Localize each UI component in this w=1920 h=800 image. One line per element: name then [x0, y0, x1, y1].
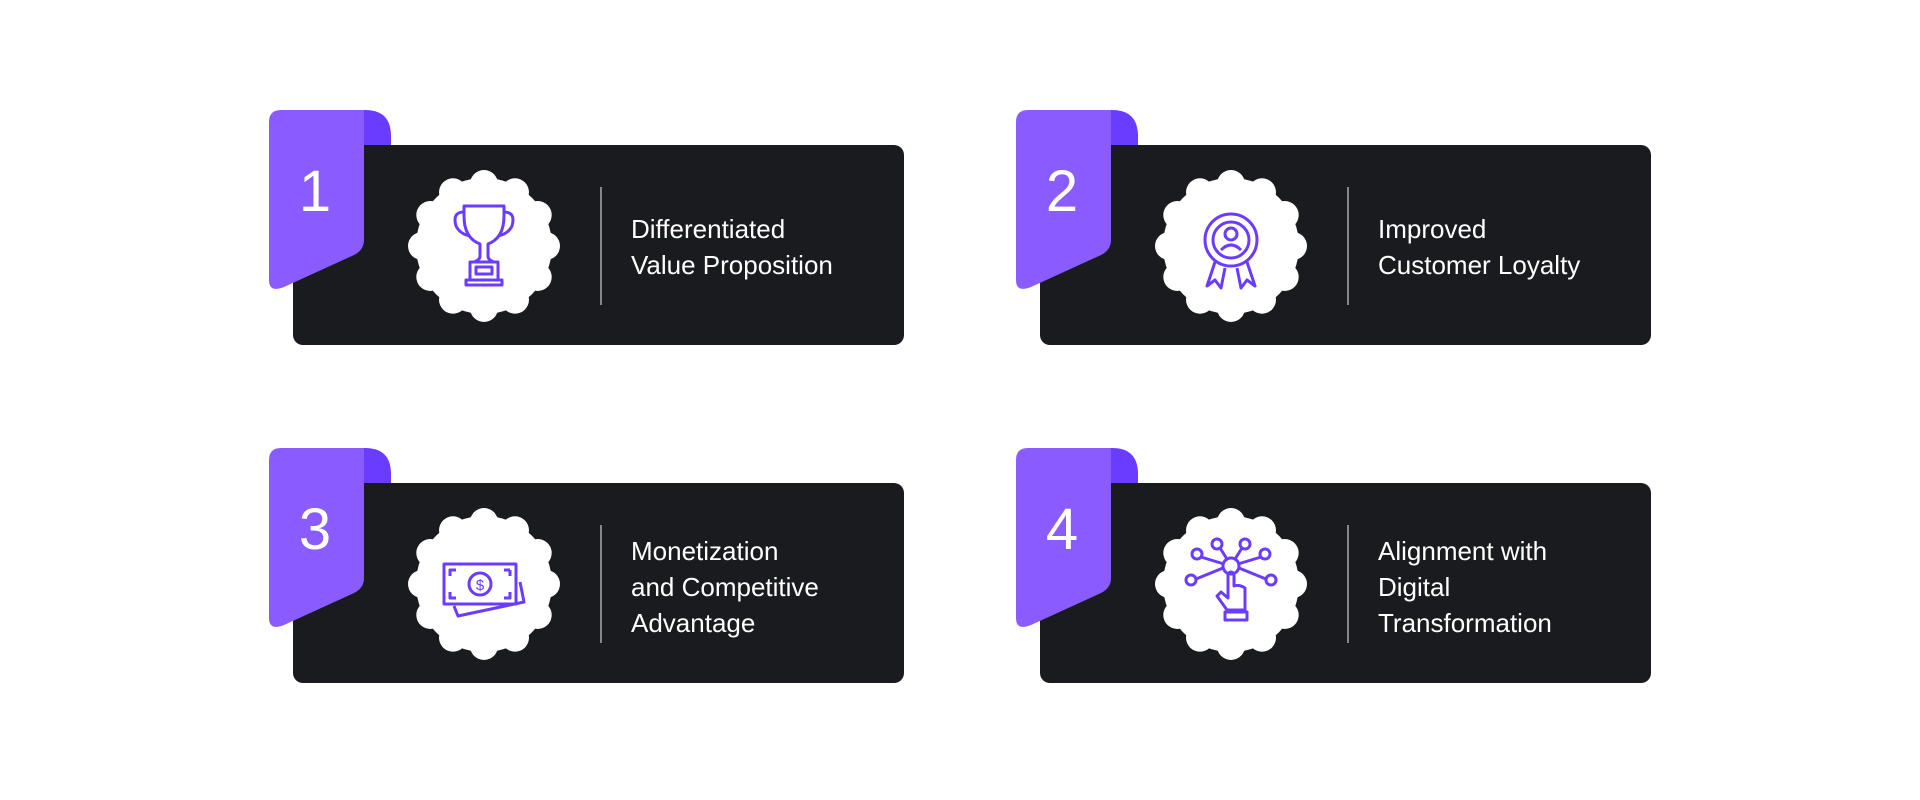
icon: digital network hand	[1155, 508, 1307, 660]
card 3: Advantage	[631, 608, 755, 638]
text: card 2: Improved	[1378, 214, 1486, 244]
card 1: Value Proposition	[631, 250, 833, 280]
number 3: 3	[299, 497, 331, 562]
card 4	[1016, 448, 1651, 683]
number 1: 1	[299, 159, 331, 224]
card 4: Digital	[1378, 572, 1450, 602]
card 3	[269, 448, 904, 683]
card 2	[1016, 110, 1651, 345]
icon: money	[408, 508, 560, 660]
card 2: Customer Loyalty	[1378, 250, 1580, 280]
number 2: 2	[1046, 159, 1078, 224]
card 4: Transformation	[1378, 608, 1552, 638]
icon: loyalty badge	[1155, 170, 1307, 322]
icon: money: $	[476, 577, 485, 594]
card 3: and Competitive	[631, 572, 819, 602]
text: card 3: Monetization	[631, 536, 778, 566]
icon: trophy badge	[408, 170, 560, 322]
card 1	[269, 110, 904, 345]
text: card 4: Alignment with	[1378, 536, 1547, 566]
text: card 1: Differentiated	[631, 214, 785, 244]
number 4: 4	[1046, 497, 1078, 562]
